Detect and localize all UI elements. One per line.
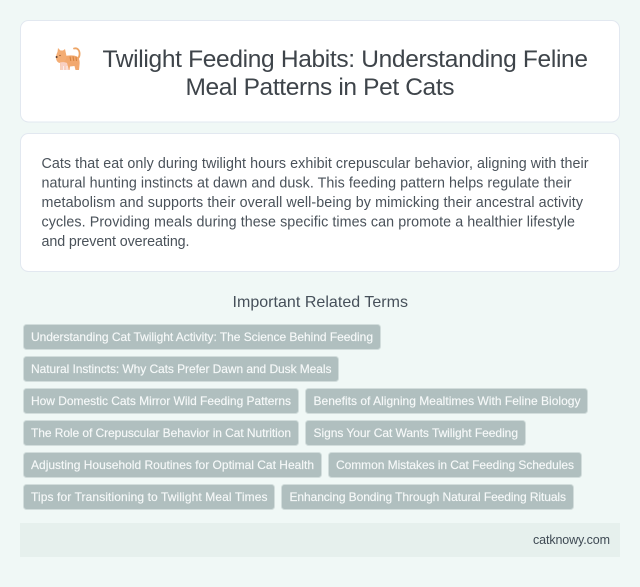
related terms tags [24, 324, 588, 510]
tag: natural instincts: Natural Instincts: Why Cats Prefer Dawn and Dusk Meals [31, 362, 332, 376]
tag: tips: Tips for Transitioning to Twilight Meal Times [31, 490, 268, 504]
description paragraph: cycles. Providing meals during these specific times can promote a healthier lifestyle [42, 214, 575, 230]
title text: Meal Patterns in Pet Cats [186, 74, 454, 101]
tag: household routines: Adjusting Household Routines for Optimal Cat Health [31, 458, 314, 472]
tag: tips [24, 484, 274, 510]
tag: natural instincts [24, 356, 338, 382]
tag: understanding cat twilight activity [24, 324, 380, 350]
tag: signs: Signs Your Cat Wants Twilight Feeding [314, 426, 518, 440]
description paragraph: metabolism and supports their overall well-being by mimicking their ancestral activity [42, 195, 584, 211]
heading: important related terms: Important Related Terms [232, 294, 408, 311]
tag: crepuscular behavior: The Role of Crepuscular Behavior in Cat Nutrition [31, 426, 291, 440]
tag: domestic cats [24, 388, 298, 414]
tag: common mistakes: Common Mistakes in Cat Feeding Schedules [336, 458, 574, 472]
tag: common mistakes [328, 452, 582, 478]
panel: description card [20, 134, 620, 272]
tag: household routines [24, 452, 322, 478]
tag: enhancing bonding: Enhancing Bonding Through Natural Feeding Rituals [290, 490, 566, 504]
footer [20, 523, 620, 557]
tag: benefits [306, 388, 588, 414]
title text [102, 46, 588, 101]
tag: understanding cat twilight activity: Understanding Cat Twilight Activity: The Science Behind Feeding [31, 330, 373, 344]
tag: enhancing bonding [282, 484, 574, 510]
tag: signs [306, 420, 526, 446]
description paragraph [42, 156, 589, 250]
description paragraph: and prevent overeating. [42, 234, 190, 250]
icon: cat [56, 48, 80, 70]
title text: Twilight Feeding Habits: Understanding Feline [102, 46, 588, 73]
tag: benefits: Benefits of Aligning Mealtimes With Feline Biology [314, 394, 580, 408]
footer: catknowy.com [533, 533, 610, 547]
tag: domestic cats: How Domestic Cats Mirror Wild Feeding Patterns [31, 394, 291, 408]
description paragraph: Cats that eat only during twilight hours exhibit crepuscular behavior, aligning with their [42, 156, 589, 172]
panel: title card [20, 20, 620, 122]
tag: crepuscular behavior [24, 420, 298, 446]
description paragraph: natural hunting instincts at dawn and dusk. This feeding pattern helps regulate their [42, 176, 572, 192]
